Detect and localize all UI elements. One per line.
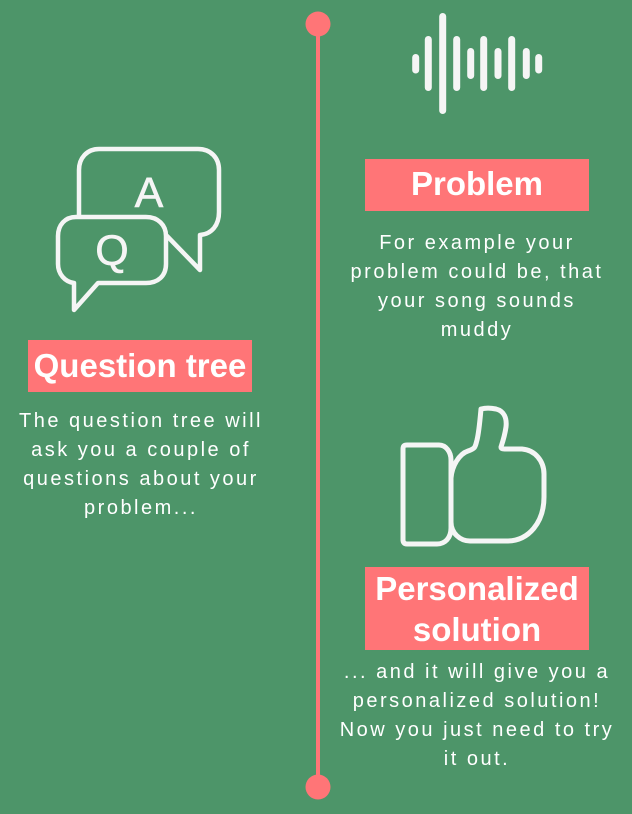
- heading: Question tree: Question tree: [34, 347, 246, 384]
- text: problem description: problem could be, that: [351, 261, 603, 283]
- heading: Personalized solution: Personalized: [375, 570, 579, 607]
- heading: Question tree: [28, 340, 252, 392]
- icon: question and answer speech bubbles: [56, 146, 222, 312]
- icon: sound wave: [412, 13, 542, 114]
- text: question tree description: The question tree will: [19, 410, 263, 432]
- heading: Problem: [365, 159, 589, 211]
- heading: Problem: Problem: [411, 165, 543, 202]
- text: solution description: it out.: [444, 748, 510, 770]
- text: problem description: muddy: [441, 319, 513, 341]
- text: solution description: ... and it will give you a: [344, 661, 610, 683]
- text: solution description: personalized solution!: [353, 690, 601, 712]
- text: solution description: [340, 661, 614, 770]
- text: problem description: your song sounds: [378, 290, 576, 312]
- icon: thumbs up: [400, 406, 546, 546]
- text: solution description: Now you just need to try: [340, 719, 614, 741]
- icon: question and answer speech bubbles: A: [135, 169, 164, 217]
- text: question tree description: questions about your: [23, 468, 259, 490]
- text: problem description: [351, 232, 603, 341]
- heading: Personalized solution: [365, 567, 589, 650]
- text: question tree description: ask you a couple of: [31, 439, 251, 461]
- text: problem description: For example your: [379, 232, 575, 254]
- text: question tree description: [19, 410, 263, 519]
- text: question tree description: problem...: [84, 497, 198, 519]
- icon: question and answer speech bubbles: Q: [95, 227, 129, 275]
- heading: Personalized solution: solution: [413, 611, 541, 648]
